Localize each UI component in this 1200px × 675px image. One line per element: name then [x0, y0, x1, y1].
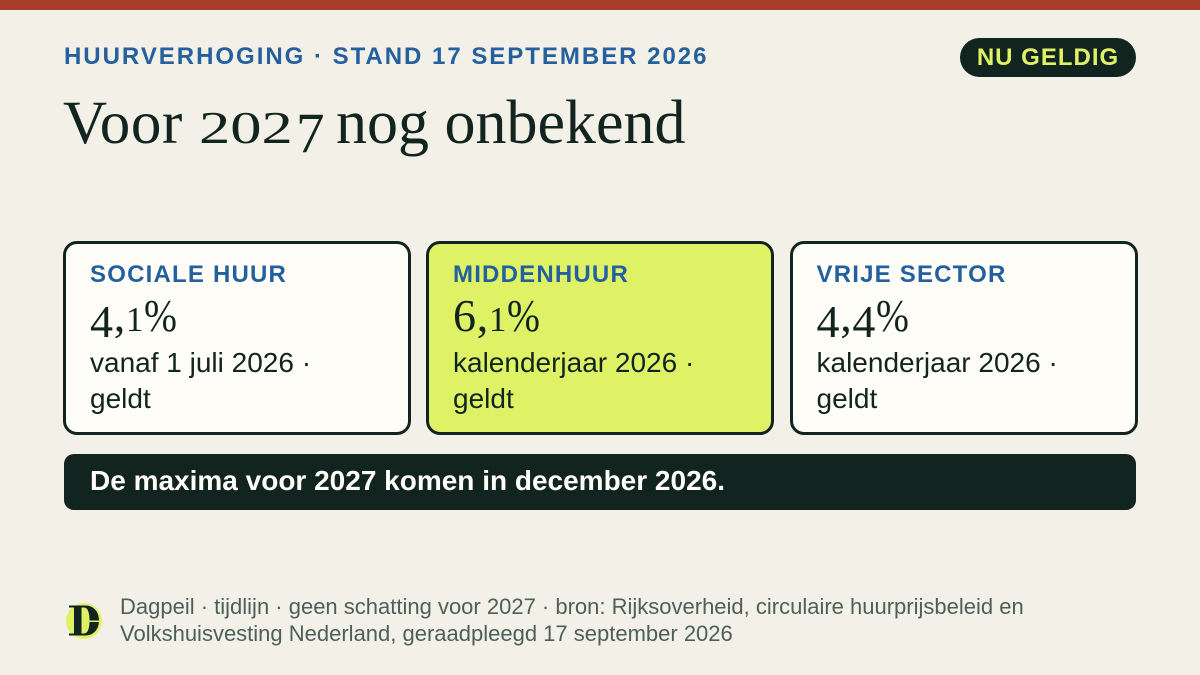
note: middenhuur	[453, 347, 694, 414]
value: 4,4%	[816, 290, 910, 347]
title: nog onbekend	[336, 89, 686, 157]
note: middenhuur: geldt	[453, 383, 514, 414]
value: 4,1%	[90, 290, 178, 347]
value: 4,4%: 4,4	[816, 290, 876, 347]
note: vrije sector	[816, 347, 1058, 414]
source note: Volkshuisvesting Nederland, geraadpleegd 17 september 2026	[120, 621, 733, 646]
note: sociale huur: geldt	[90, 383, 151, 414]
note: middenhuur: kalenderjaar 2026 ·	[453, 347, 694, 378]
value: 6,1%: %	[507, 290, 541, 341]
panel: vrije sector	[790, 241, 1138, 435]
value: 6,1%	[453, 290, 541, 341]
top accent bar	[0, 0, 1200, 10]
label: sociale huur: SOCIALE HUUR	[90, 261, 287, 288]
status badge: NU GELDIG	[977, 44, 1119, 71]
callout bar	[64, 454, 1136, 510]
callout bar: De maxima voor 2027 komen in december 2026.	[90, 465, 725, 496]
title	[63, 89, 686, 165]
note: vrije sector: kalenderjaar 2026 ·	[816, 347, 1058, 378]
value: 6,1%: 6,1	[453, 290, 507, 341]
status badge	[960, 38, 1136, 77]
label: middenhuur: MIDDENHUUR	[453, 261, 629, 288]
title: 7	[296, 102, 324, 165]
value: 4,4%: %	[876, 290, 910, 341]
title: Voor	[63, 90, 183, 157]
note: vrije sector: geldt	[816, 383, 877, 414]
label: vrije sector: VRIJE SECTOR	[816, 261, 1007, 288]
note: sociale huur: vanaf 1 juli 2026 ·	[90, 347, 311, 378]
panel: middenhuur	[426, 241, 774, 435]
kicker: HUURVERHOGING · STAND 17 SEPTEMBER 2026	[64, 43, 708, 70]
value: 4,1%: %	[144, 290, 178, 341]
source note	[120, 594, 1024, 646]
icon: Dagpeil logo	[66, 603, 102, 639]
note: sociale huur	[90, 347, 311, 414]
source note: Dagpeil · tijdlijn · geen schatting voor 2027 · bron: Rijksoverheid, circulaire huurprijsbeleid en	[120, 594, 1024, 619]
panel: sociale huur	[63, 241, 411, 435]
value: 4,1%: 4,1	[90, 290, 144, 347]
title: 202	[199, 102, 293, 153]
